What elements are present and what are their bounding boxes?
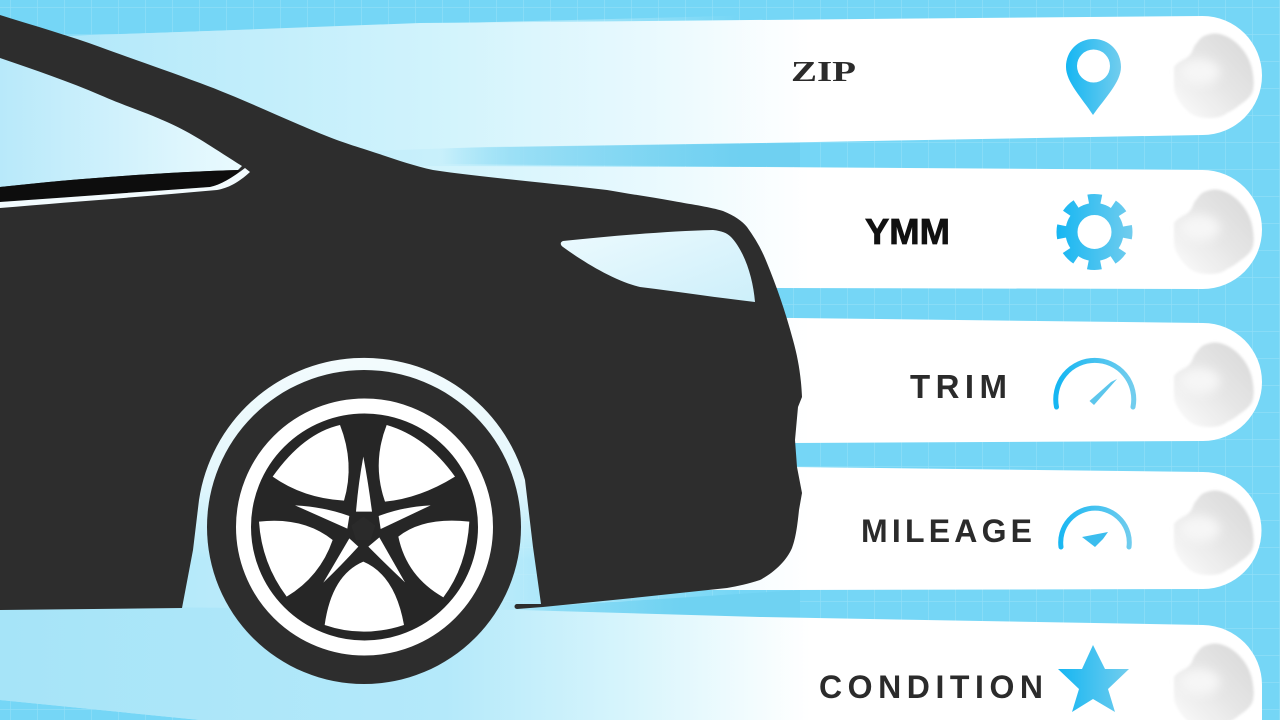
rim ring bbox=[244, 406, 486, 648]
window trim: black sliver bbox=[0, 170, 240, 202]
icon: grey blob bbox=[1174, 342, 1254, 427]
CONDITION label: CONDITION bbox=[819, 669, 1043, 705]
gap band between rows one and two bbox=[440, 143, 800, 167]
panel: MILEAGE row bbox=[700, 466, 1262, 590]
car silhouette bbox=[0, 15, 802, 684]
panel: TRIM row bbox=[700, 317, 1262, 443]
panel: CONDITION row bbox=[0, 606, 1262, 720]
panel: YMM row bbox=[100, 165, 1262, 289]
icon: grey blob bbox=[1174, 644, 1254, 720]
icon: grey blob bbox=[1174, 490, 1254, 575]
YMM label: YMM bbox=[865, 211, 950, 252]
icon: grey blob bbox=[1174, 34, 1254, 118]
car body bbox=[0, 15, 802, 610]
ZIP label: ZIP bbox=[791, 56, 856, 88]
icon: trim gauge bbox=[1056, 360, 1134, 407]
icon: grey blob bbox=[1174, 190, 1254, 274]
icon: star bbox=[1058, 645, 1129, 712]
gap band between rows four and five bbox=[520, 590, 800, 619]
icon: gear bbox=[1062, 199, 1128, 265]
side window glass bbox=[0, 58, 242, 187]
icon: location pin bbox=[1066, 39, 1121, 115]
background: pale light wash behind car bbox=[0, 14, 800, 720]
MILEAGE label: MILEAGE bbox=[861, 513, 1032, 549]
tire bbox=[207, 370, 521, 684]
panel: ZIP row bbox=[100, 16, 1262, 160]
wheel bbox=[207, 370, 521, 684]
wheel arch highlight bbox=[190, 356, 542, 606]
rim spokes and openings bbox=[259, 425, 469, 632]
TRIM label: TRIM bbox=[910, 368, 1007, 405]
headlight bbox=[561, 230, 755, 302]
window trim: white line bbox=[0, 168, 250, 208]
icon: mileage gauge bbox=[1061, 508, 1129, 547]
